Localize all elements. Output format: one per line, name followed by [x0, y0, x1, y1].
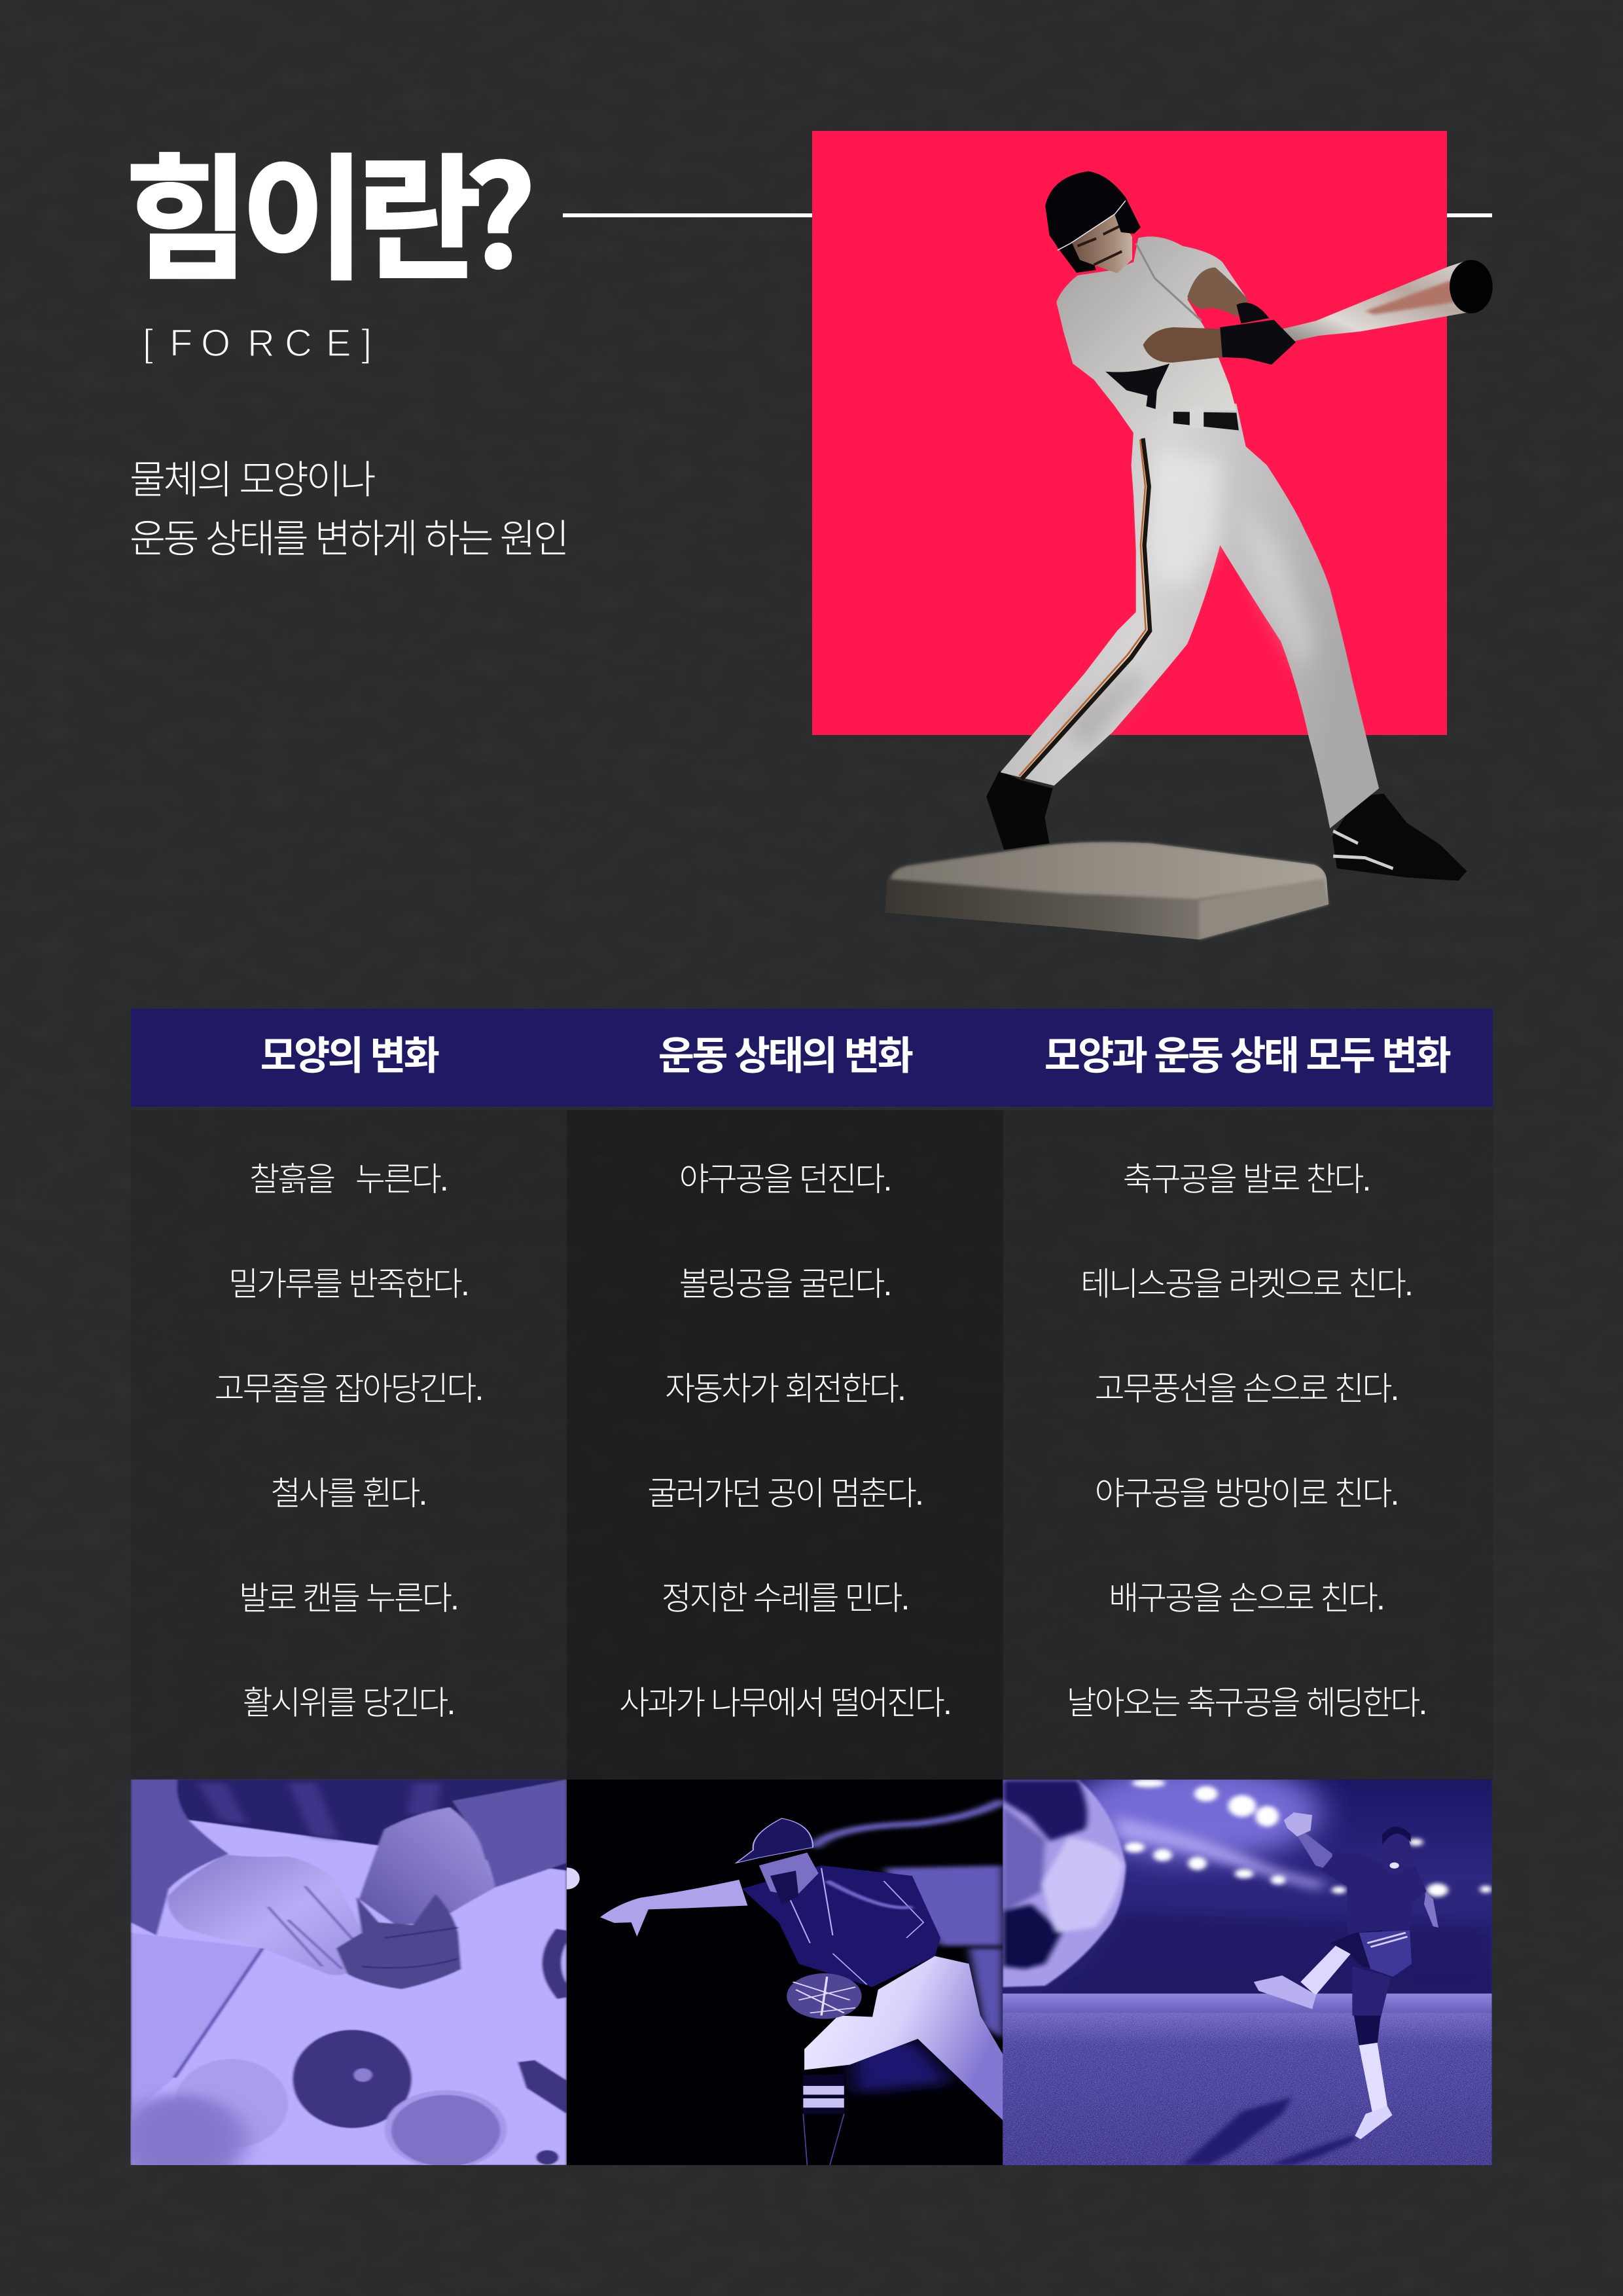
photo: hands shaping clay: [115, 1780, 567, 2185]
column 2 text list: 야구공을 던진다.: [679, 1161, 890, 1198]
column 1 text list: 활시위를 당긴다.: [243, 1685, 454, 1721]
head and helmet: [1045, 171, 1141, 274]
base: [885, 842, 1329, 939]
column 2 text list: 정지한 수레를 민다.: [662, 1580, 908, 1617]
column 1 text list: 밀가루를 반죽한다.: [228, 1266, 468, 1302]
upper arm: [1187, 268, 1248, 317]
front shoe: [1332, 794, 1467, 881]
column 3 text list: 테니스공을 라켓으로 친다.: [1080, 1266, 1412, 1302]
column 2 text list: 사과가 나무에서 떨어진다.: [619, 1685, 950, 1721]
description: 운동 상태를 변하게 하는 원인: [130, 517, 567, 561]
forearm: [1143, 327, 1222, 363]
subtitle: force: [FORCE]: [143, 322, 372, 365]
column 3 text list: 날아오는 축구공을 헤딩한다.: [1067, 1685, 1425, 1721]
column 1 text list: 찰흙을 누른다.: [249, 1161, 447, 1198]
photo: pitcher throwing: [555, 1780, 1003, 2165]
title: ?: [465, 107, 529, 308]
column 3 text list: [1067, 1161, 1425, 1721]
table header band: [131, 1009, 1493, 1107]
panel: column 3 both change: [1003, 1034, 1493, 1780]
column 3 heading: 모양과 운동 상태 모두 변화: [1044, 1034, 1451, 1078]
panel: column 2 motion change: [567, 1034, 1003, 1780]
column 2 text list: 자동차가 회전한다.: [665, 1371, 904, 1407]
column 2 text list: [619, 1161, 950, 1721]
shirt: [1056, 236, 1246, 433]
gloves and belt: [1173, 302, 1296, 431]
column 3 text list: 축구공을 발로 찬다.: [1123, 1161, 1369, 1198]
column 1 text list: 발로 캔들 누른다.: [239, 1580, 457, 1617]
column 3 text list: 고무풍선을 손으로 친다.: [1095, 1371, 1397, 1407]
column 1 text list: 고무줄을 잡아당긴다.: [215, 1371, 482, 1407]
illustration: baseball batter on base: [885, 171, 1493, 939]
column 3 text list: 야구공을 방망이로 친다.: [1095, 1475, 1397, 1512]
column 2 text list: 굴러가던 공이 멈춘다.: [647, 1475, 922, 1512]
column 3 text list: 배구공을 손으로 친다.: [1109, 1580, 1383, 1617]
description: 물체의 모양이나: [130, 458, 375, 502]
panel: column 1 shape change: [131, 1034, 567, 1780]
column 1 text list: [215, 1161, 482, 1721]
column 1 heading: 모양의 변화: [260, 1034, 439, 1078]
panel: red square: [812, 131, 1447, 735]
bat: [1276, 260, 1493, 344]
column 2 text list: 볼링공을 굴린다.: [679, 1266, 890, 1302]
title rule line: [563, 213, 1492, 217]
pants: [1001, 401, 1379, 829]
back shoe: [986, 771, 1053, 850]
title: 힘이란: [125, 145, 474, 296]
column 2 heading: 운동 상태의 변화: [658, 1034, 913, 1078]
description: [130, 458, 567, 561]
column 1 text list: 철사를 휜다.: [271, 1475, 425, 1512]
photo: soccer player kicking ball: [1003, 1762, 1492, 2165]
